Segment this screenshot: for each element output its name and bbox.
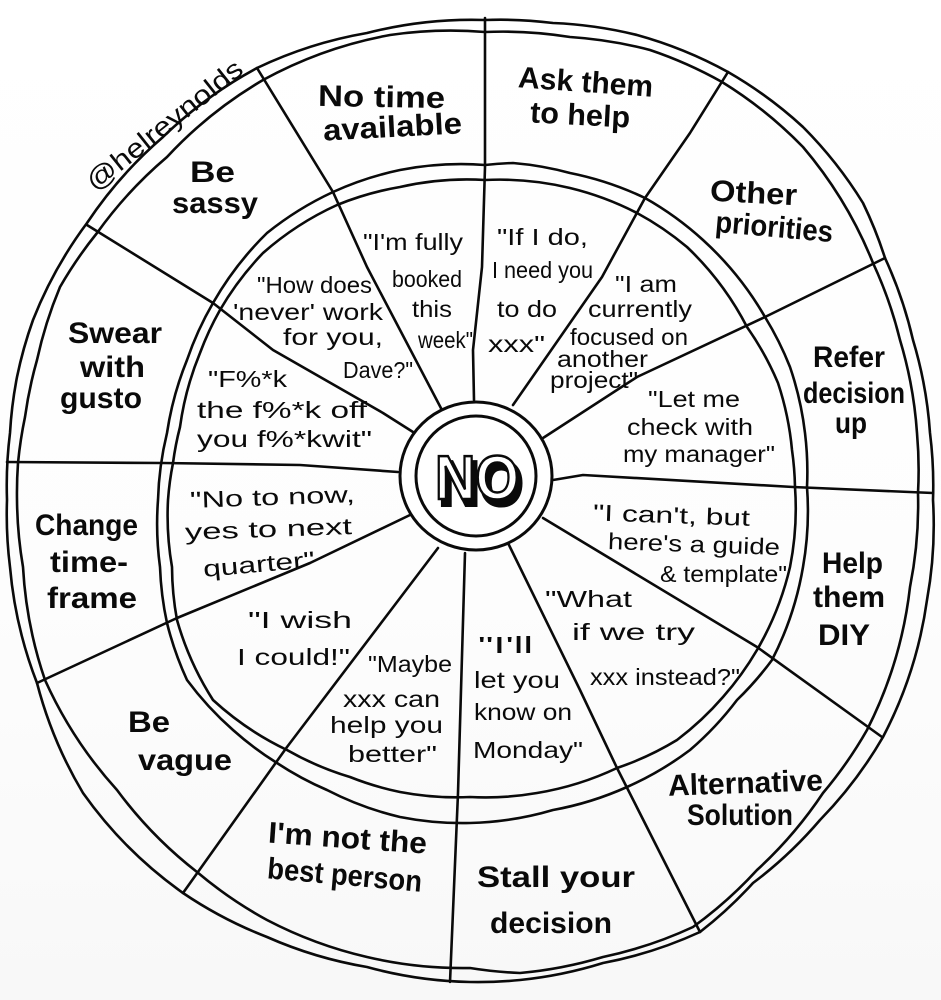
quote: next quarter: quarter" [202, 546, 316, 582]
quote: check with manager [623, 386, 775, 467]
label: other priorities [709, 175, 834, 249]
quote: another project: another [557, 346, 648, 372]
quote: fully booked [363, 229, 473, 353]
center badge: NO [400, 402, 552, 550]
attribution handle: @helreynolds [80, 53, 249, 197]
quote: what if: "What [545, 586, 633, 612]
label: be vague: Be [128, 706, 170, 739]
quote: maybe xxx [330, 651, 452, 767]
quote: fully booked: booked [392, 266, 462, 292]
label: ask them to help [517, 61, 654, 135]
label: alternative solution: Solution [687, 799, 793, 832]
quote: maybe xxx: xxx can [343, 686, 440, 712]
label: refer decision up [803, 341, 905, 440]
quote: swear [197, 366, 372, 452]
quote: what if: if we try [572, 619, 696, 645]
label: other priorities: priorities [714, 206, 834, 249]
quote: another project [550, 271, 693, 393]
quote: maybe xxx: "Maybe [368, 651, 452, 677]
quote: I wish: "I wish [248, 607, 352, 633]
label: refer decision up: Refer [813, 341, 885, 374]
label: not the best person: best person [266, 852, 423, 899]
quote: check with manager: "Let me [648, 386, 740, 412]
label: change time-frame [35, 509, 138, 615]
quote: how does never work: "How does [257, 272, 372, 298]
quote: guide and template: here's a guide [608, 528, 780, 560]
quote: what if: xxx instead?" [590, 664, 740, 690]
quote: what if [545, 586, 740, 690]
label: not the best person [266, 817, 428, 899]
label: alternative solution [667, 764, 823, 832]
label: be vague [128, 706, 232, 777]
quote: swear: the f%*k off [197, 397, 368, 423]
quote: another project: project" [550, 367, 638, 393]
quote: swear: "F%*k [208, 366, 288, 392]
label: swear with gusto: with [79, 351, 145, 384]
quote: another project: focused on [570, 324, 688, 350]
quote: next quarter: "No to now, [190, 481, 355, 513]
quote: check with manager: my manager" [623, 441, 775, 467]
quote: fully booked: this [412, 296, 452, 322]
quote: let you know [473, 632, 583, 763]
quote: another project: currently [588, 296, 693, 322]
label: no time available: available [322, 107, 463, 148]
quote: if I do: xxx" [488, 331, 545, 357]
label: change time-frame: Change [35, 509, 138, 542]
label: other priorities: Other [709, 175, 798, 212]
quote: swear: you f%*kwit" [197, 426, 372, 452]
center badge: NO: NO [435, 444, 519, 513]
quote: if I do [488, 224, 593, 357]
label: be sassy: Be [190, 156, 235, 189]
label: no time available [318, 80, 463, 148]
label: help them DIY: DIY [818, 619, 870, 652]
quote: let you know: know on [474, 699, 572, 725]
label: refer decision up: up [835, 407, 867, 440]
label: not the best person: I'm not the [267, 817, 428, 861]
label: help them DIY: Help [822, 547, 883, 580]
center badge: NO: NO [439, 450, 523, 519]
label: no time available: No time [318, 80, 445, 115]
quote: guide and template: & template" [660, 561, 787, 587]
label: help them DIY: them [813, 581, 885, 614]
label: alternative solution: Alternative [667, 764, 823, 803]
quote: check with manager: check with [627, 414, 753, 440]
label: stall your decision [477, 861, 635, 940]
quote: another project: "I am [615, 271, 677, 297]
inner ring quotes [185, 224, 787, 767]
quote: fully booked: "I'm fully [363, 229, 464, 255]
quote: next quarter [185, 481, 355, 582]
quote: let you know: "I'll [478, 632, 533, 658]
quote: if I do: "If I do, [497, 224, 588, 250]
label: swear with gusto: gusto [60, 382, 142, 415]
quote: next quarter: yes to next [185, 513, 353, 545]
label: ask them to help: to help [529, 96, 631, 135]
label: swear with gusto: Swear [68, 317, 162, 350]
quote: if I do: I need you [492, 257, 593, 283]
quote: if I do: to do [497, 296, 557, 322]
quote: I wish: I could!" [237, 644, 350, 670]
quote: maybe xxx: better" [348, 741, 437, 767]
label: ask them to help: Ask them [517, 61, 654, 104]
label: change time-frame: frame [47, 582, 137, 615]
label: be vague: vague [138, 744, 232, 777]
label: be sassy [172, 156, 258, 220]
label: refer decision up: decision [803, 377, 905, 410]
quote: let you know: let you [474, 667, 560, 693]
quote: I wish [237, 607, 352, 670]
label: stall your decision: Stall your [477, 861, 635, 894]
quote: how does never work: 'never' work [233, 299, 384, 325]
label: be sassy: sassy [172, 187, 258, 220]
quote: how does never work: Dave?" [343, 357, 413, 383]
quote: how does never work [233, 272, 413, 383]
label: swear with gusto [60, 317, 162, 415]
label: stall your decision: decision [490, 907, 612, 940]
label: help them DIY [813, 547, 885, 652]
quote: guide and template: "I can't, but [593, 499, 751, 531]
quote: guide and template [593, 499, 787, 587]
quote: maybe xxx: help you [330, 712, 443, 738]
quote: let you know: Monday" [473, 737, 583, 763]
quote: how does never work: for you, [283, 324, 383, 350]
quote: fully booked: week" [417, 327, 473, 353]
label: change time-frame: time- [50, 546, 128, 579]
